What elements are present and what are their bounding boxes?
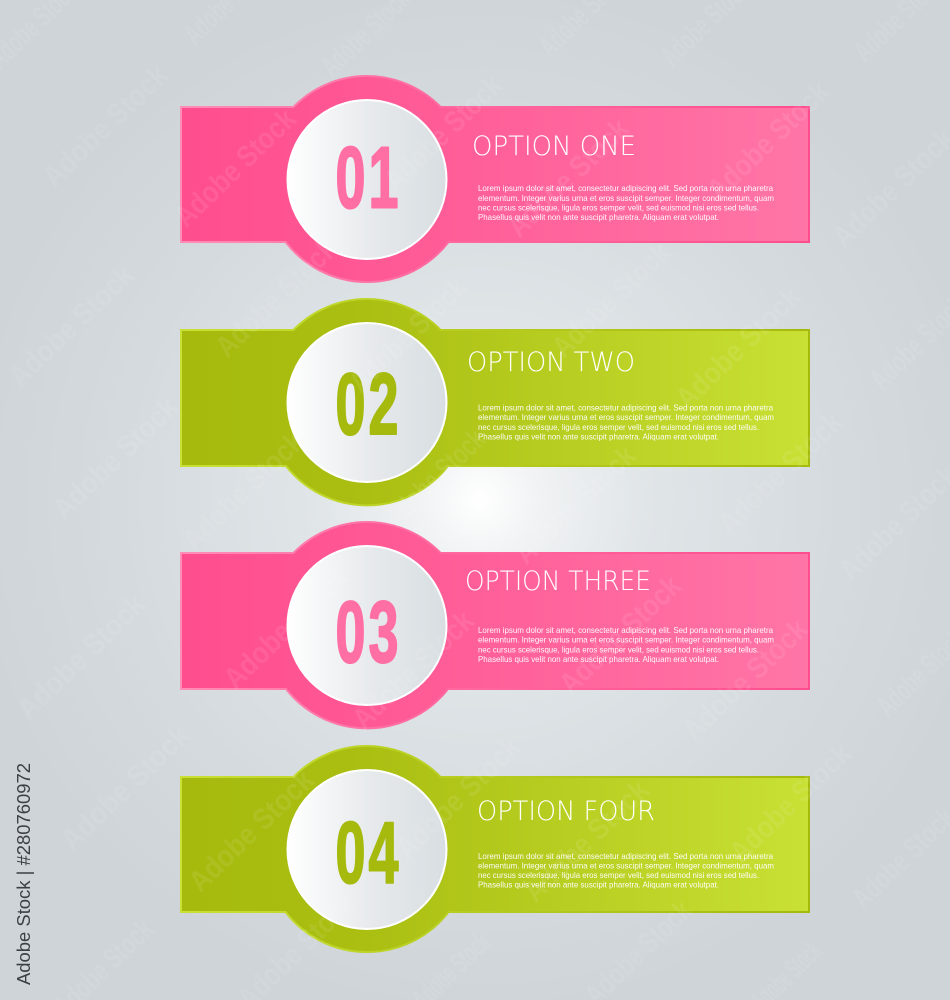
body text 1: Lorem ipsum dolor sit amet, consectetur adipiscing elit. Sed porta non urna pharetra xyxy=(478,183,773,193)
body text 2: Phasellus quis velit non ante suscipit pharetra. Aliquam erat volutpat. xyxy=(478,432,719,442)
stock watermarks: Adobe Stock xyxy=(176,425,311,557)
heading option two: OPTION TWO xyxy=(467,347,635,378)
body text 3: Lorem ipsum dolor sit amet, consectetur adipiscing elit. Sed porta non urna pharetra xyxy=(478,625,773,635)
stock watermarks: Adobe Stock xyxy=(2,259,141,394)
stock watermarks: Adobe Stock xyxy=(379,423,492,533)
stock watermarks: Adobe Stock xyxy=(553,569,688,701)
vertical stock id caption: Adobe Stock | #280760972 xyxy=(13,763,34,985)
body text 2 xyxy=(478,402,774,442)
body text 4: Lorem ipsum dolor sit amet, consectetur adipiscing elit. Sed porta non urna pharetra xyxy=(478,851,773,861)
body text 4: Phasellus quis velit non ante suscipit pharetra. Aliquam erat volutpat. xyxy=(478,880,719,890)
stock watermarks: Adobe Stock xyxy=(55,719,196,857)
banner 2: option two xyxy=(181,299,809,505)
stock watermarks: Adobe Stock xyxy=(209,232,344,364)
stock watermarks: Adobe Stock xyxy=(517,774,656,909)
stock watermarks: Adobe Stock xyxy=(378,69,509,197)
number 01: 01 xyxy=(336,129,398,227)
body text 4: nec cursus scelerisque, ligula eros semper velit, sed euismod nisi eros sed tellus. xyxy=(478,870,759,880)
stock watermarks: Adobe Stock xyxy=(711,406,850,541)
body text 1: elementum. Integer varius urna et eros suscipit semper. Integer condimentum, quam xyxy=(478,193,774,203)
body text 1: Phasellus quis velit non ante suscipit pharetra. Aliquam erat volutpat. xyxy=(478,212,719,222)
banner 3: option three xyxy=(181,522,809,728)
stock watermarks: Adobe Stock xyxy=(701,75,836,207)
heading option four: OPTION FOUR xyxy=(477,796,655,827)
number 03: 03 xyxy=(336,584,398,681)
body text 1: nec cursus scelerisque, ligula eros semper velit, sed euismod nisi eros sed tellus. xyxy=(478,202,759,212)
stock watermarks: Adobe Stock xyxy=(723,737,858,869)
stock watermarks: Adobe Stock xyxy=(36,59,175,194)
body text 1 xyxy=(478,183,774,222)
stock watermarks: Adobe Stock xyxy=(343,271,474,399)
stock watermarks: Adobe Stock xyxy=(182,764,321,899)
stock watermarks: Adobe Stock xyxy=(346,604,481,736)
body text 3 xyxy=(478,625,774,664)
banner 4 disc xyxy=(288,770,446,929)
banner 4: option four xyxy=(181,746,809,952)
number 02: 02 xyxy=(336,356,398,453)
banner 2 disc xyxy=(288,323,446,482)
stock watermarks: Adobe Stock xyxy=(508,439,643,571)
stock watermarks: Adobe Stock xyxy=(676,613,815,748)
stock watermarks: Adobe Stock xyxy=(46,391,185,526)
stock watermarks: Adobe Stock xyxy=(11,588,152,726)
body text 2: nec cursus scelerisque, ligula eros semper velit, sed euismod nisi eros sed tellus. xyxy=(478,422,759,432)
stock watermarks: Adobe Stock xyxy=(168,102,303,234)
banner 4 shape xyxy=(181,746,809,952)
banner 1 shape xyxy=(181,76,809,282)
body text 3: Phasellus quis velit non ante suscipit pharetra. Aliquam erat volutpat. xyxy=(478,654,719,664)
number 04: 04 xyxy=(336,804,398,902)
body text 4 xyxy=(478,851,774,890)
banner 1: option one xyxy=(181,76,809,282)
banner 2 shape xyxy=(181,299,809,505)
banner 3 disc xyxy=(288,546,446,705)
stock watermarks: Adobe Stock xyxy=(669,281,808,416)
stock watermarks: Adobe Stock xyxy=(217,561,356,696)
heading option one: OPTION ONE xyxy=(472,131,636,162)
body text 3: nec cursus scelerisque, ligula eros semper velit, sed euismod nisi eros sed tellus. xyxy=(478,644,759,654)
stock watermarks: Adobe Stock xyxy=(546,236,677,364)
stock watermarks: Adobe Stock xyxy=(501,112,636,244)
body text 4: elementum. Integer varius urna et eros suscipit semper. Integer condimentum, quam xyxy=(478,860,774,870)
body text 2: elementum. Integer varius urna et eros suscipit semper. Integer condimentum, quam xyxy=(478,412,774,422)
stock watermarks: Adobe Stock xyxy=(389,731,528,866)
body text 2: Lorem ipsum dolor sit amet, consectetur adipiscing elit. Sed porta non urna pharetra xyxy=(478,402,773,412)
body text 3: elementum. Integer varius urna et eros suscipit semper. Integer condimentum, quam xyxy=(478,634,774,644)
heading option three: OPTION THREE xyxy=(465,566,651,597)
banner 3 shape xyxy=(181,522,809,728)
banner 1 disc xyxy=(288,100,446,259)
